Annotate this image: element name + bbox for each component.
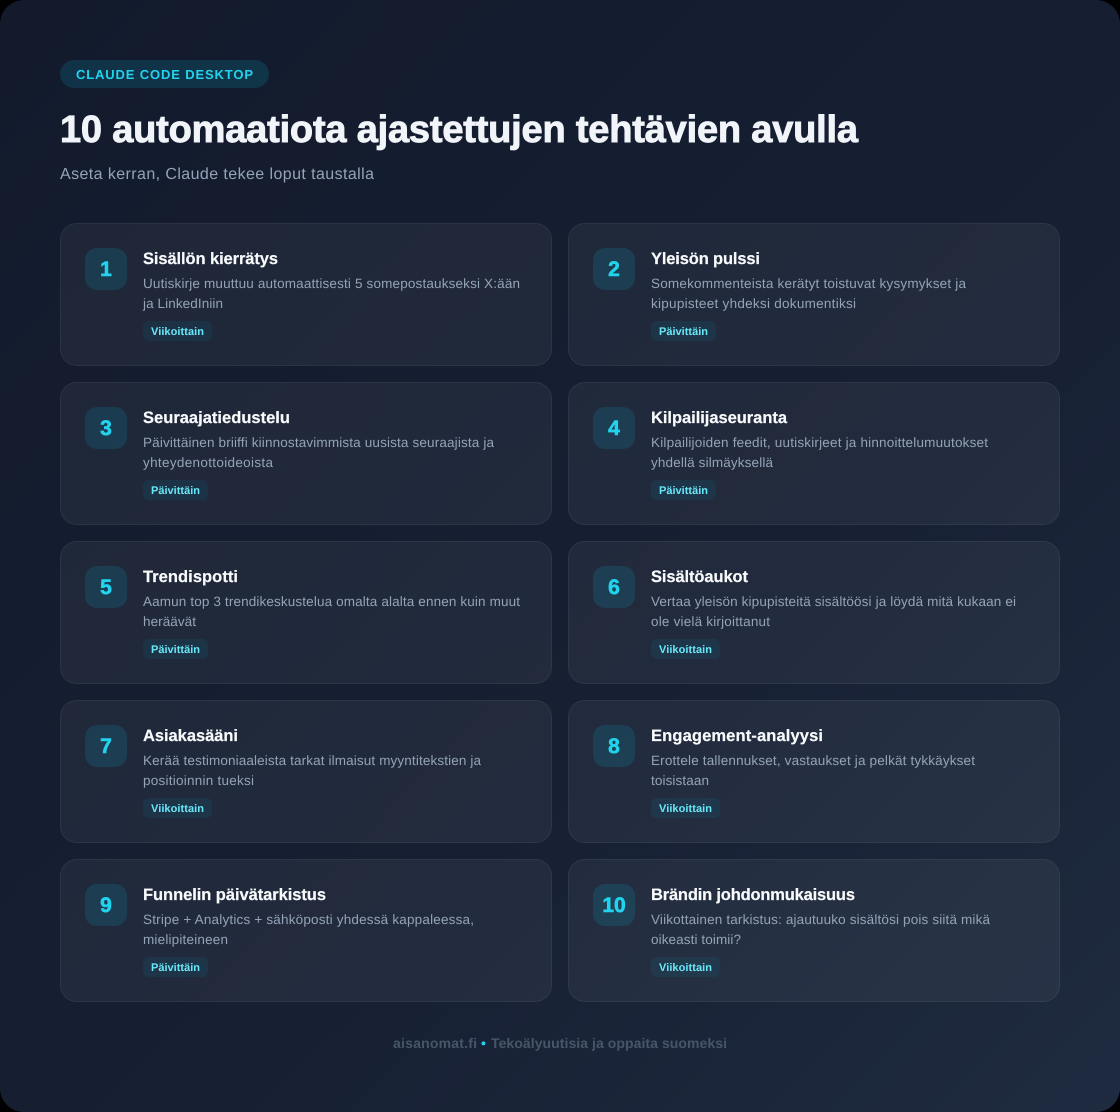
footer: aisanomat.fi bbox=[393, 1035, 477, 1051]
frequency tag 6: Viikoittain bbox=[659, 644, 712, 656]
description 8 bbox=[651, 753, 975, 788]
card title 2: Yleisön pulssi bbox=[651, 250, 760, 268]
description 8: Erottele tallennukset, vastaukset ja pelkät tykkäykset bbox=[651, 753, 975, 768]
card title 1: Sisällön kierrätys bbox=[143, 250, 278, 268]
frequency tag 4: Päivittäin bbox=[659, 485, 708, 497]
number badge 5 bbox=[85, 566, 127, 608]
frequency tag 3: Päivittäin bbox=[151, 485, 200, 497]
frequency tag 2: Päivittäin bbox=[659, 326, 708, 338]
description 3: yhteydenottoideoista bbox=[143, 455, 273, 470]
number badge 8: 8 bbox=[608, 735, 620, 758]
frequency tag 10: Viikoittain bbox=[659, 962, 712, 974]
frequency tag 1 bbox=[143, 321, 212, 341]
frequency tag 3 bbox=[143, 480, 208, 500]
number badge 9 bbox=[85, 884, 127, 926]
card title 10: Brändin johdonmukaisuus bbox=[651, 886, 855, 904]
panel: card 8 bbox=[568, 700, 1060, 842]
description 5: heräävät bbox=[143, 614, 196, 629]
number badge 10: 10 bbox=[602, 894, 626, 917]
panel: card 5 bbox=[60, 542, 552, 684]
frequency tag 7: Viikoittain bbox=[151, 803, 204, 815]
description 3 bbox=[143, 435, 494, 470]
number badge 7: 7 bbox=[100, 735, 112, 758]
number badge 4 bbox=[593, 407, 635, 449]
description 1 bbox=[142, 276, 520, 311]
card title 7: Asiakasääni bbox=[143, 727, 238, 745]
description 4: yhdellä silmäyksellä bbox=[651, 455, 773, 470]
description 5: Aamun top 3 trendikeskustelua omalta alalta ennen kuin muut bbox=[143, 594, 520, 609]
description 4: Kilpailijoiden feedit, uutiskirjeet ja hinnoittelumuutokset bbox=[651, 435, 988, 450]
frequency tag 5: Päivittäin bbox=[151, 644, 200, 656]
number badge 8 bbox=[593, 725, 635, 767]
number badge 3: 3 bbox=[100, 417, 112, 440]
description 9: mielipiteineen bbox=[143, 932, 228, 947]
category pill bbox=[60, 60, 269, 88]
number badge 6 bbox=[593, 566, 635, 608]
panel: card 6 bbox=[568, 542, 1060, 684]
header bbox=[60, 60, 859, 183]
title: 10 automaatiota ajastettujen tehtävien avulla bbox=[60, 109, 859, 151]
number badge 3 bbox=[85, 407, 127, 449]
number badge 4: 4 bbox=[608, 417, 620, 440]
number badge 1: 1 bbox=[100, 258, 112, 281]
description 3: Päivittäinen briiffi kiinnostavimmista uusista seuraajista ja bbox=[143, 435, 494, 450]
description 9 bbox=[143, 912, 474, 947]
number badge 7 bbox=[85, 725, 127, 767]
description 2: kipupisteet yhdeksi dokumentiksi bbox=[651, 296, 856, 311]
description 4 bbox=[651, 435, 988, 470]
frequency tag 7 bbox=[143, 798, 212, 818]
card title 9: Funnelin päivätarkistus bbox=[143, 886, 326, 904]
description 7 bbox=[143, 753, 481, 788]
frequency tag 9: Päivittäin bbox=[151, 962, 200, 974]
subtitle: Aseta kerran, Claude tekee loput taustalla bbox=[60, 166, 374, 183]
description 2 bbox=[651, 276, 966, 311]
description 8: toisistaan bbox=[651, 773, 709, 788]
category pill: CLAUDE CODE DESKTOP bbox=[76, 67, 253, 82]
panel: card 1 bbox=[60, 224, 552, 366]
frequency tag 8 bbox=[651, 798, 720, 818]
description 2: Somekommenteista kerätyt toistuvat kysymykset ja bbox=[651, 276, 966, 291]
number badge 5: 5 bbox=[100, 576, 112, 599]
footer: • bbox=[481, 1035, 486, 1051]
description 6: ole vielä kirjoittanut bbox=[651, 614, 770, 629]
description 1: ja LinkedIniin bbox=[142, 296, 223, 311]
card title 8: Engagement-analyysi bbox=[651, 727, 823, 745]
panel: card 4 bbox=[568, 382, 1060, 524]
description 10: Viikottainen tarkistus: ajautuuko sisältösi pois siitä mikä bbox=[651, 912, 990, 927]
panel: card 3 bbox=[60, 382, 552, 524]
panel: card 10 bbox=[568, 860, 1060, 1002]
description 10: oikeasti toimii? bbox=[651, 932, 741, 947]
description 9: Stripe + Analytics + sähköposti yhdessä kappaleessa, bbox=[143, 912, 474, 927]
frequency tag 9 bbox=[143, 957, 208, 977]
description 6: Vertaa yleisön kipupisteitä sisältöösi ja löydä mitä kukaan ei bbox=[651, 594, 1016, 609]
description 10 bbox=[651, 912, 990, 947]
number badge 9: 9 bbox=[100, 894, 112, 917]
description 5 bbox=[143, 594, 520, 629]
number badge 6: 6 bbox=[608, 576, 620, 599]
frequency tag 2 bbox=[651, 321, 716, 341]
card title 5: Trendispotti bbox=[143, 568, 238, 586]
number badge 2 bbox=[593, 248, 635, 290]
card title 3: Seuraajatiedustelu bbox=[143, 409, 290, 427]
card title 6: Sisältöaukot bbox=[651, 568, 748, 586]
frequency tag 5 bbox=[143, 639, 208, 659]
panel: card 2 bbox=[568, 224, 1060, 366]
description 6 bbox=[651, 594, 1016, 629]
card title 4: Kilpailijaseuranta bbox=[651, 409, 788, 427]
frequency tag 4 bbox=[651, 480, 716, 500]
frequency tag 1: Viikoittain bbox=[151, 326, 204, 338]
number badge 2: 2 bbox=[608, 258, 620, 281]
frequency tag 6 bbox=[651, 639, 720, 659]
panel: card 9 bbox=[60, 860, 552, 1002]
description 7: Kerää testimoniaaleista tarkat ilmaisut myyntitekstien ja bbox=[143, 753, 481, 768]
frequency tag 8: Viikoittain bbox=[659, 803, 712, 815]
description 1: Uutiskirje muuttuu automaattisesti 5 somepostaukseksi X:ään bbox=[143, 276, 520, 291]
footer: Tekoälyuutisia ja oppaita suomeksi bbox=[491, 1035, 727, 1051]
number badge 1 bbox=[85, 248, 127, 290]
number badge 10 bbox=[593, 884, 635, 926]
frequency tag 10 bbox=[651, 957, 720, 977]
description 7: positioinnin tueksi bbox=[143, 773, 254, 788]
panel: card 7 bbox=[60, 700, 552, 842]
